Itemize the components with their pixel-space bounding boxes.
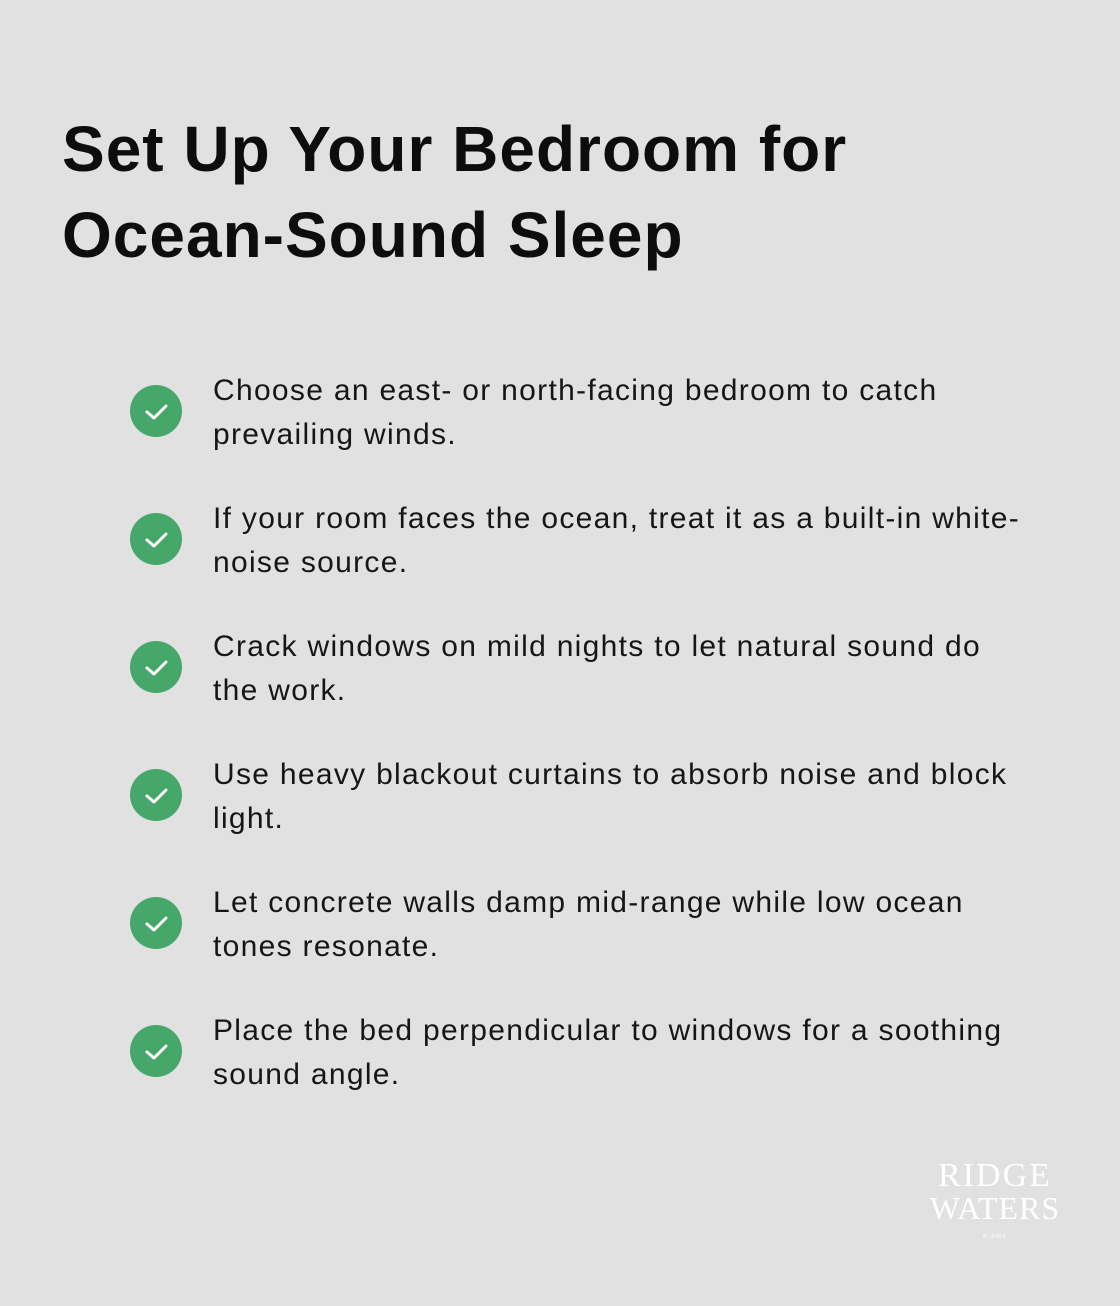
icon: check	[130, 385, 182, 437]
icon: check	[130, 641, 182, 693]
text	[213, 630, 981, 707]
logo	[930, 1157, 1060, 1240]
icon: check	[130, 769, 182, 821]
text: Choose an east- or north-facing bedroom to catch	[213, 374, 937, 407]
text: sound angle.	[213, 1058, 400, 1091]
icon: check	[130, 1025, 182, 1077]
item 6	[130, 1014, 1002, 1091]
text	[213, 374, 937, 451]
item 5	[130, 886, 964, 963]
title	[62, 113, 847, 271]
text: noise source.	[213, 546, 408, 579]
logo: RIDGE	[938, 1157, 1052, 1194]
icon: check	[130, 897, 182, 949]
item 1	[130, 374, 937, 451]
item 2	[130, 502, 1020, 579]
text: tones resonate.	[213, 930, 439, 963]
text	[213, 502, 1020, 579]
title: Ocean-Sound Sleep	[62, 199, 684, 271]
text	[213, 758, 1007, 835]
text	[213, 886, 964, 963]
item 4	[130, 758, 1007, 835]
logo: WATERS	[930, 1190, 1060, 1226]
title: Set Up Your Bedroom for	[62, 113, 847, 185]
icon: check	[130, 513, 182, 565]
text: prevailing winds.	[213, 418, 457, 451]
text: Place the bed perpendicular to windows for a soothing	[213, 1014, 1002, 1047]
text: the work.	[213, 674, 346, 707]
item 3	[130, 630, 981, 707]
text: Let concrete walls damp mid-range while low ocean	[213, 886, 964, 919]
text: If your room faces the ocean, treat it as a built-in white-	[213, 502, 1020, 535]
text	[213, 1014, 1002, 1091]
logo: KIAMA	[983, 1234, 1007, 1240]
text: Use heavy blackout curtains to absorb noise and block	[213, 758, 1007, 791]
text: Crack windows on mild nights to let natural sound do	[213, 630, 981, 663]
text: light.	[213, 802, 284, 835]
